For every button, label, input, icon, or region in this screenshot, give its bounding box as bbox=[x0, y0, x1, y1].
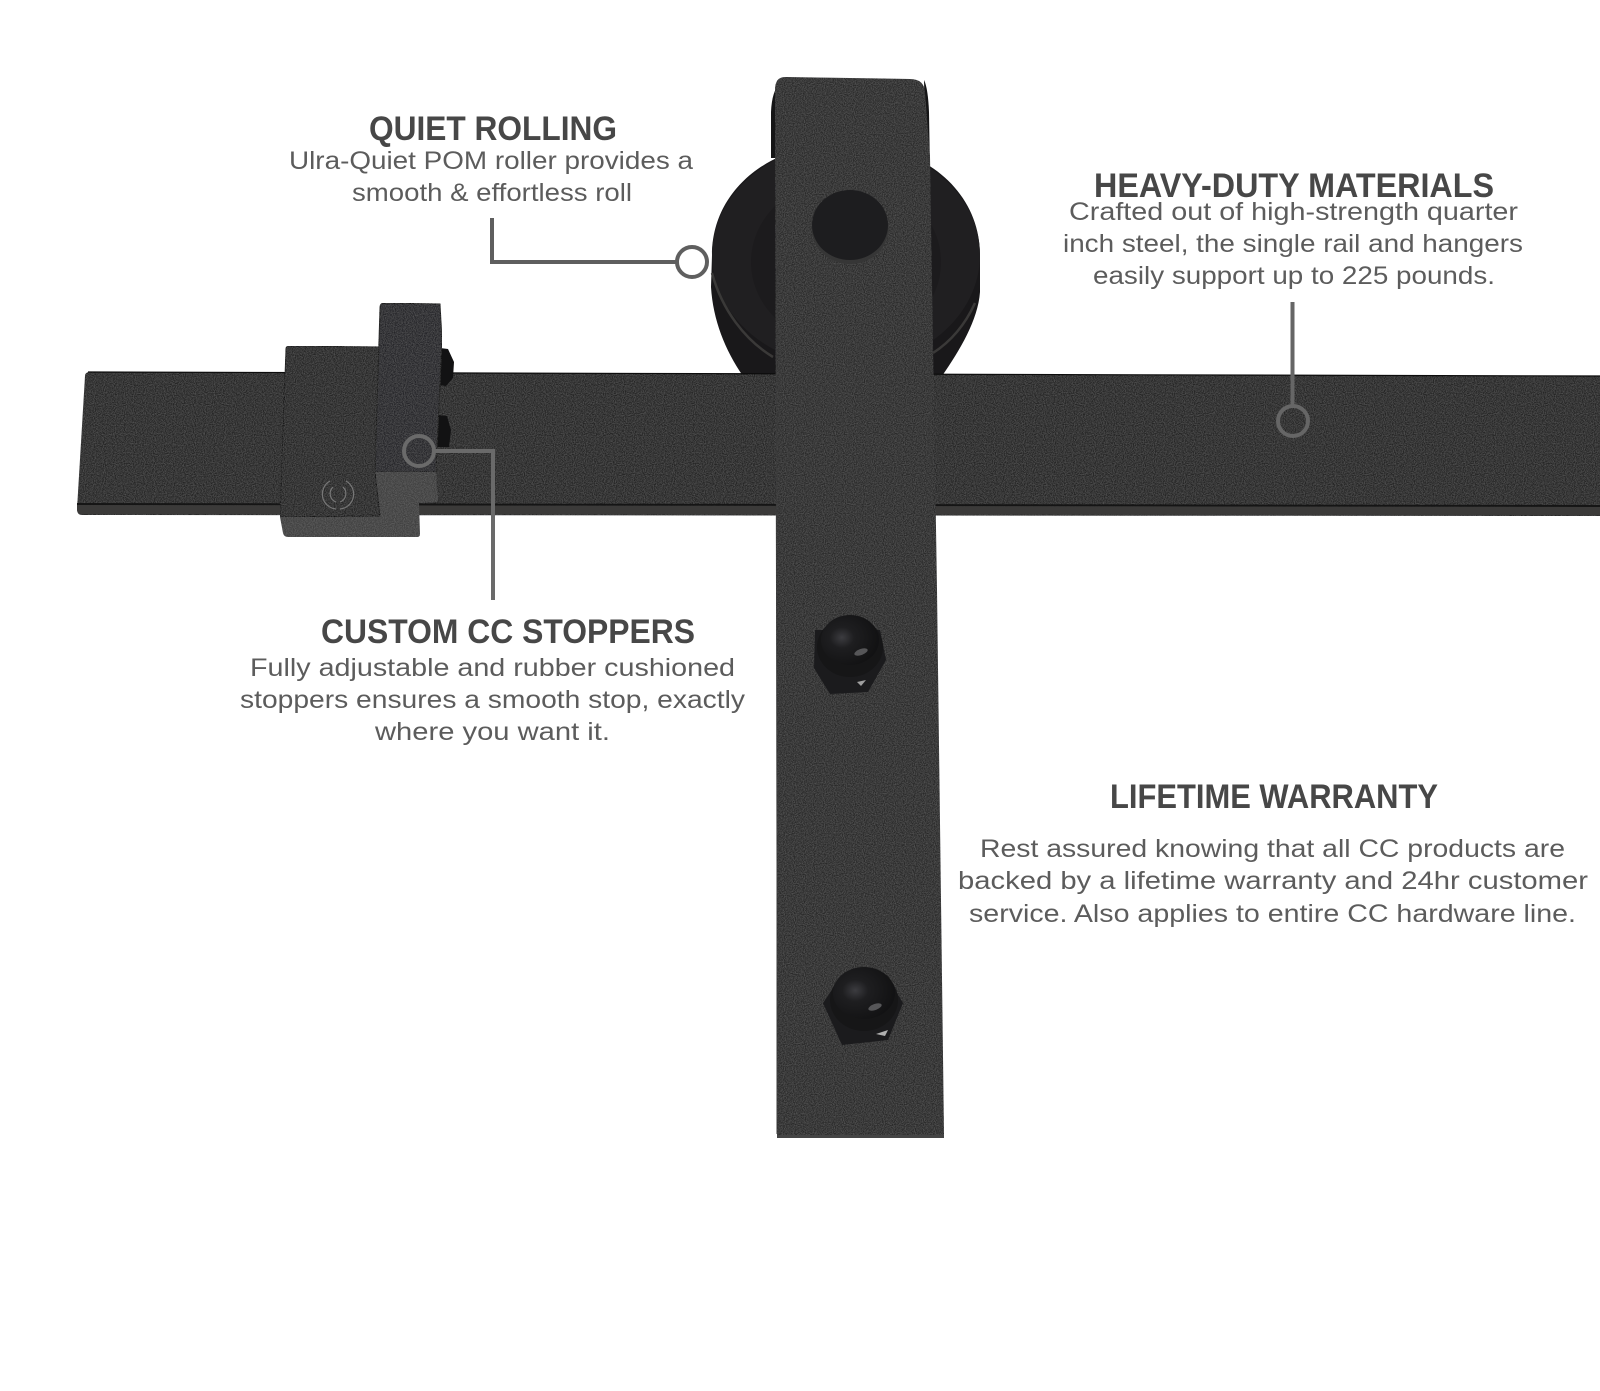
product: barn door track hardware bbox=[77, 77, 1600, 1138]
text: heavy-duty description: easily support up to 225 pounds. bbox=[1093, 262, 1495, 290]
leader line: stoppers bbox=[404, 436, 493, 600]
callout: quiet rolling bbox=[289, 110, 707, 277]
stopper underside bbox=[280, 472, 438, 537]
stopper bbox=[280, 303, 454, 537]
text: warranty description: service. Also applies to entire CC hardware line. bbox=[969, 900, 1576, 928]
heading: heavy-duty materials: HEAVY-DUTY MATERIALS bbox=[1094, 167, 1494, 205]
text: quiet rolling description bbox=[289, 147, 693, 207]
text: quiet rolling description: smooth & effortless roll bbox=[352, 179, 632, 207]
callout: lifetime warranty bbox=[958, 778, 1588, 928]
heading: lifetime warranty: LIFETIME WARRANTY bbox=[1110, 778, 1438, 816]
text: stoppers description: where you want it. bbox=[374, 718, 610, 746]
text: warranty description bbox=[958, 835, 1588, 928]
icon: CC logo bbox=[322, 481, 354, 509]
roller wheel bbox=[711, 143, 980, 376]
heading: quiet rolling: QUIET ROLLING bbox=[369, 110, 617, 148]
stopper front block bbox=[280, 346, 382, 517]
text: quiet rolling description: Ulra-Quiet POM roller provides a bbox=[289, 147, 693, 175]
leader line: quiet rolling bbox=[492, 218, 707, 277]
text: stoppers description: stoppers ensures a smooth stop, exactly bbox=[240, 686, 746, 714]
heading: custom cc stoppers: CUSTOM CC STOPPERS bbox=[321, 613, 695, 651]
callout: heavy-duty materials bbox=[1063, 167, 1523, 436]
text: heavy-duty description bbox=[1063, 198, 1523, 290]
stopper upper plate bbox=[375, 303, 442, 472]
hanger nut upper bbox=[814, 615, 886, 694]
text: stoppers description: Fully adjustable and rubber cushioned bbox=[250, 654, 735, 682]
leader line: heavy-duty bbox=[1278, 302, 1308, 436]
text: warranty description: Rest assured knowing that all CC products are bbox=[980, 835, 1565, 863]
text: warranty description: backed by a lifetime warranty and 24hr customer bbox=[958, 867, 1588, 895]
roller axle cap bbox=[812, 190, 888, 264]
callout: custom cc stoppers bbox=[240, 436, 746, 746]
text: stoppers description bbox=[240, 654, 746, 746]
text: heavy-duty description: inch steel, the single rail and hangers bbox=[1063, 230, 1523, 258]
text: heavy-duty description: Crafted out of high-strength quarter bbox=[1069, 198, 1518, 226]
hanger strap bbox=[771, 77, 944, 1138]
stopper rear bolts bbox=[436, 348, 454, 447]
rail bbox=[77, 372, 1600, 516]
hanger nut lower bbox=[823, 967, 903, 1045]
